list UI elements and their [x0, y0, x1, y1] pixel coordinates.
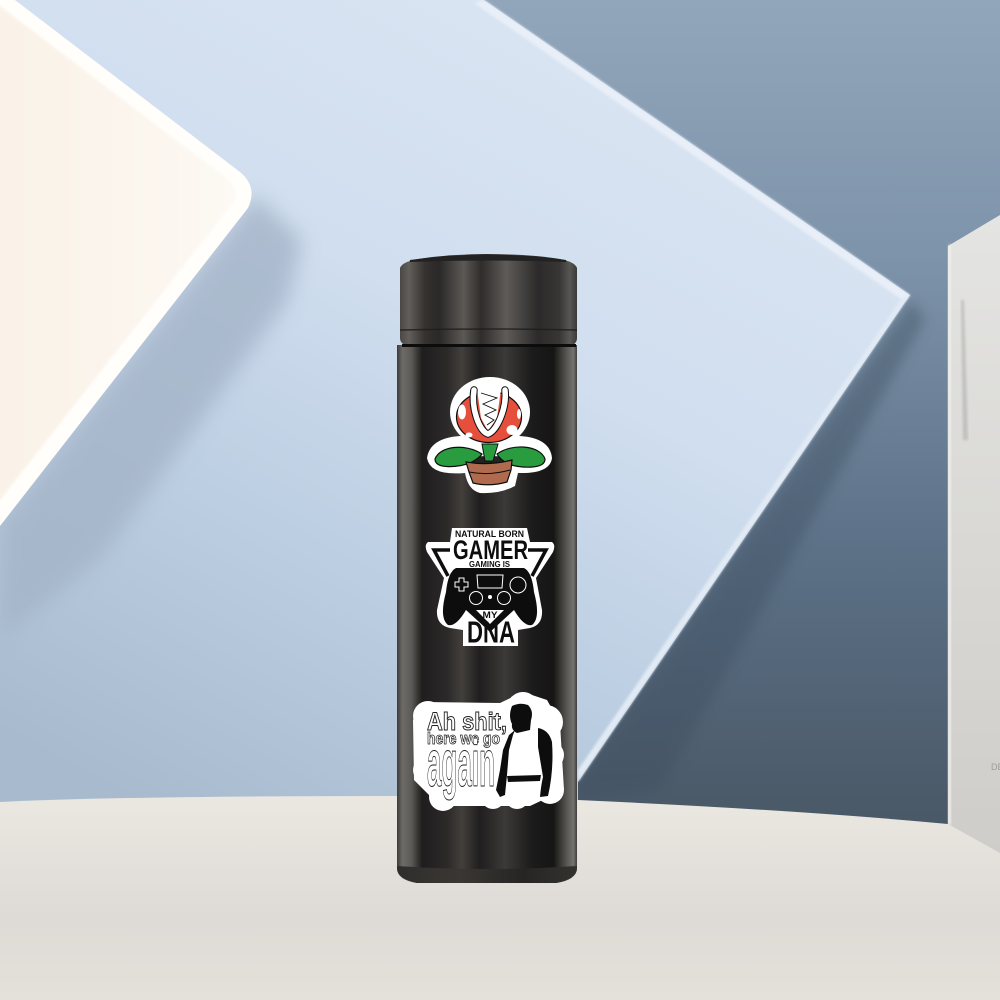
- cap groove: [402, 344, 576, 347]
- caption text: Ah shit,: [427, 708, 507, 736]
- sticker: natural born gamer: GAMING IS: [469, 559, 510, 569]
- white spots: [458, 404, 521, 438]
- mouth interior: [477, 389, 501, 431]
- game controller: [443, 568, 537, 632]
- right leaf: [497, 447, 545, 467]
- shadow of white panel: [0, 195, 302, 640]
- red head: [456, 392, 522, 442]
- lips: [473, 390, 505, 434]
- stem: [482, 444, 498, 461]
- sticker white backing: [413, 692, 564, 811]
- black thermos bottle: [397, 254, 577, 883]
- soil: [467, 456, 511, 464]
- paper shadow on wall: [578, 300, 925, 800]
- teeth: [481, 393, 497, 425]
- sticker: natural born gamer: GAMER: [453, 535, 528, 565]
- belt: [507, 775, 541, 782]
- sticker white backing: [427, 377, 552, 493]
- caption text: here we go: [427, 729, 500, 748]
- sticker white backing: [426, 528, 554, 646]
- sticker: natural born gamer: [426, 528, 554, 650]
- bottle body: [397, 345, 577, 883]
- bottle base ring: [397, 866, 577, 883]
- cap: [400, 254, 577, 346]
- cap lower band: [400, 329, 577, 330]
- white panel at left: [0, 0, 252, 540]
- right arm: [538, 728, 552, 797]
- left leaf: [435, 447, 482, 467]
- sticker: piranha plant: [427, 377, 552, 493]
- sticker: here we go again: [413, 692, 564, 811]
- sticker: natural born gamer: DNA: [467, 614, 515, 650]
- head: [510, 704, 532, 733]
- sticker: natural born gamer: MY: [482, 610, 498, 621]
- open book at right: [948, 215, 1000, 856]
- man silhouette: [496, 704, 552, 797]
- triangle frame: [434, 550, 546, 576]
- left arm: [496, 730, 515, 797]
- pot: [466, 460, 512, 485]
- light blue paper sheet: [0, 0, 910, 802]
- cap top rim: [410, 256, 566, 261]
- caption text: [427, 708, 507, 800]
- white table surface: [0, 796, 1000, 1000]
- sticker text: NATURAL BORN: [455, 529, 524, 540]
- sticker: here we go again: again: [427, 726, 495, 800]
